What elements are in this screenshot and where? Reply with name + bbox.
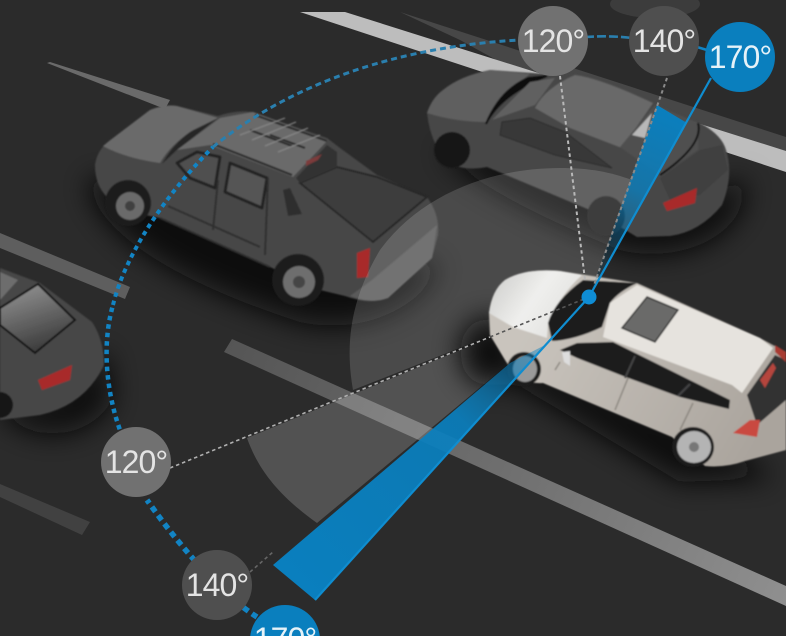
badge: 170 degrees top <box>705 22 775 92</box>
dashed angle lines <box>170 76 667 572</box>
pickup windows <box>177 152 220 188</box>
white car sunroof <box>622 297 678 342</box>
blue beam: upper 170 degree wedge <box>589 105 687 297</box>
badge: 140 degrees top: 140° <box>633 23 695 59</box>
pickup roof rack <box>213 115 327 175</box>
sensor coverage sector: upper <box>350 168 632 390</box>
pickup truck bed <box>300 167 427 242</box>
dashed blue range arc <box>107 36 707 617</box>
sensor coverage sector: lower <box>247 297 589 523</box>
sedan rear window and trunk <box>620 105 698 175</box>
badge: 140 degrees top <box>629 6 699 76</box>
sedan roof <box>535 75 653 148</box>
white car hood <box>489 270 582 338</box>
badge: 140 degrees lower: 140° <box>186 567 248 603</box>
pickup rear bumper <box>350 225 437 301</box>
badge: 120 degrees left <box>101 427 171 497</box>
sedan side window <box>500 118 612 168</box>
camera point <box>582 290 596 304</box>
badge: 120 degrees top: 120° <box>522 23 584 59</box>
white car mirror <box>562 351 570 366</box>
blue beam: lower 170 degree wedge <box>273 344 547 600</box>
pickup hood <box>103 106 218 163</box>
white car wheels <box>507 352 541 386</box>
pickup tail light <box>357 248 370 278</box>
badge: 120 degrees top <box>518 6 588 76</box>
car shadows <box>0 150 745 433</box>
badge: 170 degrees bottom <box>250 605 320 636</box>
pickup roof <box>177 112 328 177</box>
left car tail light <box>38 365 72 390</box>
white car side windows <box>560 342 730 409</box>
shadow under white car <box>460 318 775 482</box>
white car windshield <box>548 280 637 341</box>
badge: 120 degrees left: 120° <box>105 444 167 480</box>
left car rear window <box>0 284 75 353</box>
car: white estate with camera <box>489 270 786 467</box>
pickup body lines <box>160 178 270 267</box>
pickup wheels <box>105 180 324 306</box>
car: dark pickup <box>95 106 438 306</box>
white car door lines <box>555 362 693 430</box>
white car tail lights <box>733 420 760 437</box>
blue beam edge lines <box>315 78 711 600</box>
white car rear window <box>747 355 786 425</box>
car: dark sedan left edge <box>0 268 104 420</box>
badge: 170 degrees top: 170° <box>709 39 771 75</box>
sedan wheels <box>434 132 470 168</box>
sedan hood <box>427 70 530 122</box>
sedan tail light <box>663 188 697 211</box>
badge: 140 degrees lower <box>182 550 252 620</box>
white car roof <box>603 285 773 393</box>
car: dark sedan top right <box>427 70 729 237</box>
